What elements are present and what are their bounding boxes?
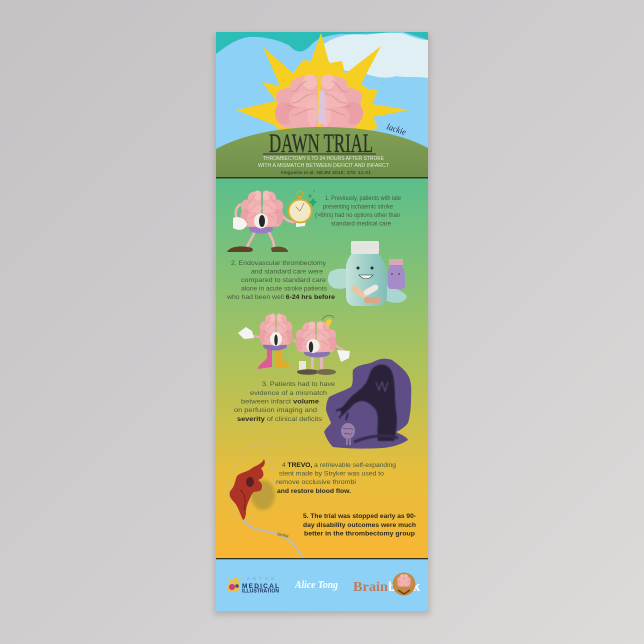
step 1 text: 1. Previously, patients with late	[325, 195, 401, 202]
stent wire outline	[228, 437, 284, 523]
pill bottle character	[328, 241, 407, 306]
small purple bottle	[388, 259, 405, 289]
step 2 text: 2. Endovascular thrombectomy	[231, 260, 327, 267]
artist mark: lackie	[277, 531, 290, 539]
step 5 text	[303, 513, 416, 538]
sun	[236, 33, 409, 140]
small brain in shadow	[341, 423, 355, 445]
logo: brainbook: Brain	[353, 580, 388, 595]
step 4 text	[276, 462, 396, 495]
signature: lackie	[385, 121, 407, 137]
stopwatch	[288, 191, 312, 222]
step 3 text: 3. Patients had to have	[262, 381, 335, 388]
clot shadow	[251, 480, 275, 510]
step 5 text: better in the thrombectomy group	[304, 530, 415, 538]
hill	[216, 127, 428, 178]
icon: sparkles	[308, 190, 318, 207]
step 3 text: severity of clinical deficits	[237, 416, 323, 423]
step 5 text: day disability outcomes were much	[303, 522, 416, 529]
footer band	[216, 558, 428, 611]
logo: medical illustration	[227, 576, 279, 594]
step 3 text: between infarct volume	[241, 398, 319, 406]
brain rising	[275, 75, 363, 129]
brain with stopwatch character	[227, 190, 306, 252]
logo: alice tong: Alice Tong	[294, 579, 338, 591]
step 4 text: and restore blood flow.	[277, 488, 351, 495]
step 2 text: and standard care were	[251, 268, 323, 276]
step 3 text: on perfusion imaging and	[234, 407, 317, 414]
citation: Nogueira et al. NEJM 2018; 378: 11-21	[281, 170, 371, 176]
logo: brainbook: book	[388, 579, 421, 594]
logo: brainbook	[353, 572, 421, 596]
logo: medical illustration: ABYSS	[247, 576, 275, 581]
step 1 text: presenting ischaemic stroke	[323, 204, 393, 210]
step 4 text: 4 TREVO, a retrievable self-expanding	[282, 462, 396, 469]
poster shadow	[214, 34, 430, 615]
step 3 text: evidence of a mismatch	[250, 390, 327, 397]
subtitle	[258, 156, 389, 169]
step 3 text	[234, 381, 335, 423]
logo: medical illustration: MEDICAL	[242, 583, 279, 590]
two brain characters	[238, 313, 350, 375]
subtitle: WITH A MISMATCH BETWEEN DEFICIT AND INFARCT	[258, 163, 389, 169]
header divider line	[216, 177, 428, 178]
step 1 text: standard medical care	[331, 220, 391, 228]
title: DAWN TRIAL	[269, 129, 373, 158]
step 4 text: stent made by Stryker was used to	[279, 470, 384, 478]
step 2 text	[226, 260, 335, 301]
step 2 text: who had been well 6-24 hrs before	[226, 294, 335, 301]
gradient panel	[216, 178, 428, 559]
logo: medical illustration: ILLUSTRATION	[242, 588, 279, 594]
guide wire	[243, 520, 303, 558]
title underline	[263, 154, 376, 155]
step 1 text	[315, 195, 401, 228]
step 5 text: 5. The trial was stopped early as 90-	[303, 513, 416, 520]
shadow monster	[324, 359, 411, 449]
step 4 text: remove occlusive thrombi	[276, 479, 357, 486]
step 2 text: compared to standard care	[241, 277, 326, 284]
sky header	[216, 32, 428, 178]
step 2 text: alone in acute stroke patients	[241, 286, 328, 292]
blood clot	[230, 459, 265, 520]
step 1 text: (>6hrs) had no options other than	[315, 212, 400, 219]
poster	[216, 32, 428, 611]
subtitle: THROMBECTOMY 6 TO 24 HOURS AFTER STROKE	[263, 156, 385, 162]
